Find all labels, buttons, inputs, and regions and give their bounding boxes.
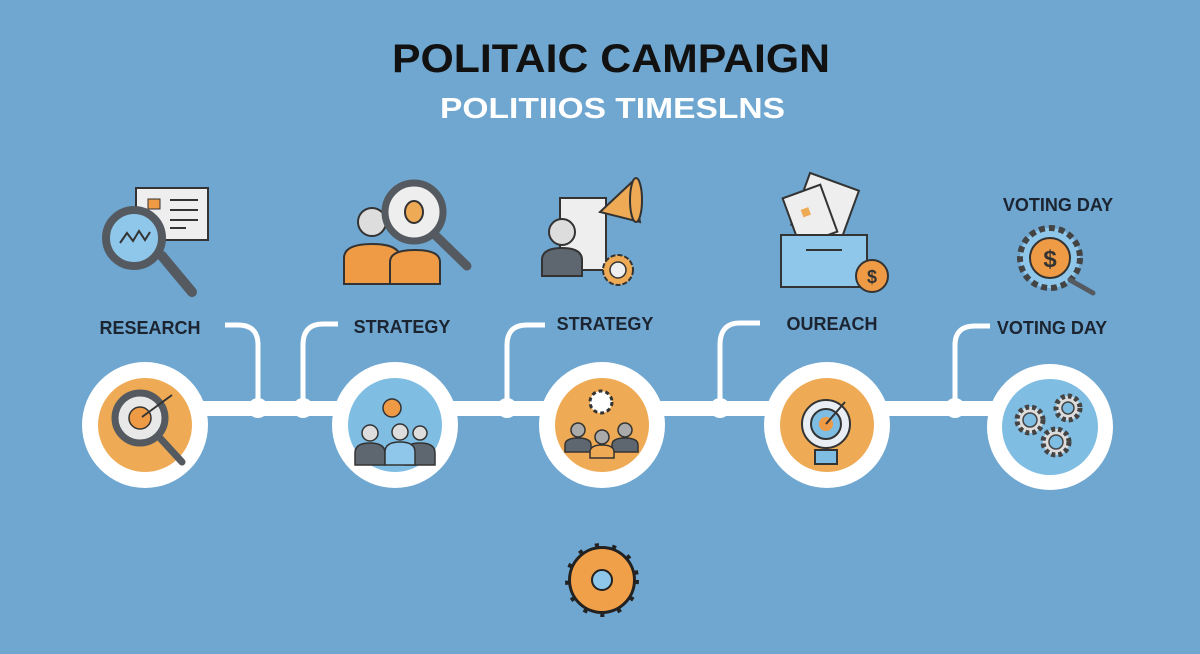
title: POLITAIC CAMPAIGN <box>392 37 830 81</box>
icon: bottom gear <box>568 546 636 614</box>
labels: OUREACH <box>786 314 878 334</box>
circle 5: gears <box>987 364 1113 490</box>
circle 2: team <box>332 362 458 488</box>
labels: STRATEGY <box>557 314 653 334</box>
labels: STRATEGY <box>354 317 450 337</box>
timeline line <box>190 323 1010 418</box>
icon: ballot box: $ <box>867 267 877 287</box>
icon: strategy people magnifier <box>344 183 467 284</box>
subtitle: POLITIIOS TIMESLNS <box>440 93 785 125</box>
circle 1: research target <box>82 362 208 488</box>
circle 4: outreach bulb <box>764 362 890 488</box>
labels: RESEARCH <box>99 318 201 338</box>
labels: VOTING DAY <box>997 318 1107 338</box>
circle 3: strategy <box>539 362 665 488</box>
icon: dollar gear <box>1020 228 1093 293</box>
icon: megaphone person <box>542 178 642 285</box>
icon: research magnifier <box>106 188 208 292</box>
labels: VOTING DAY <box>1003 195 1113 215</box>
icon: dollar gear: $ <box>1043 246 1057 273</box>
icon: ballot box <box>781 173 888 292</box>
labels <box>99 195 1113 338</box>
